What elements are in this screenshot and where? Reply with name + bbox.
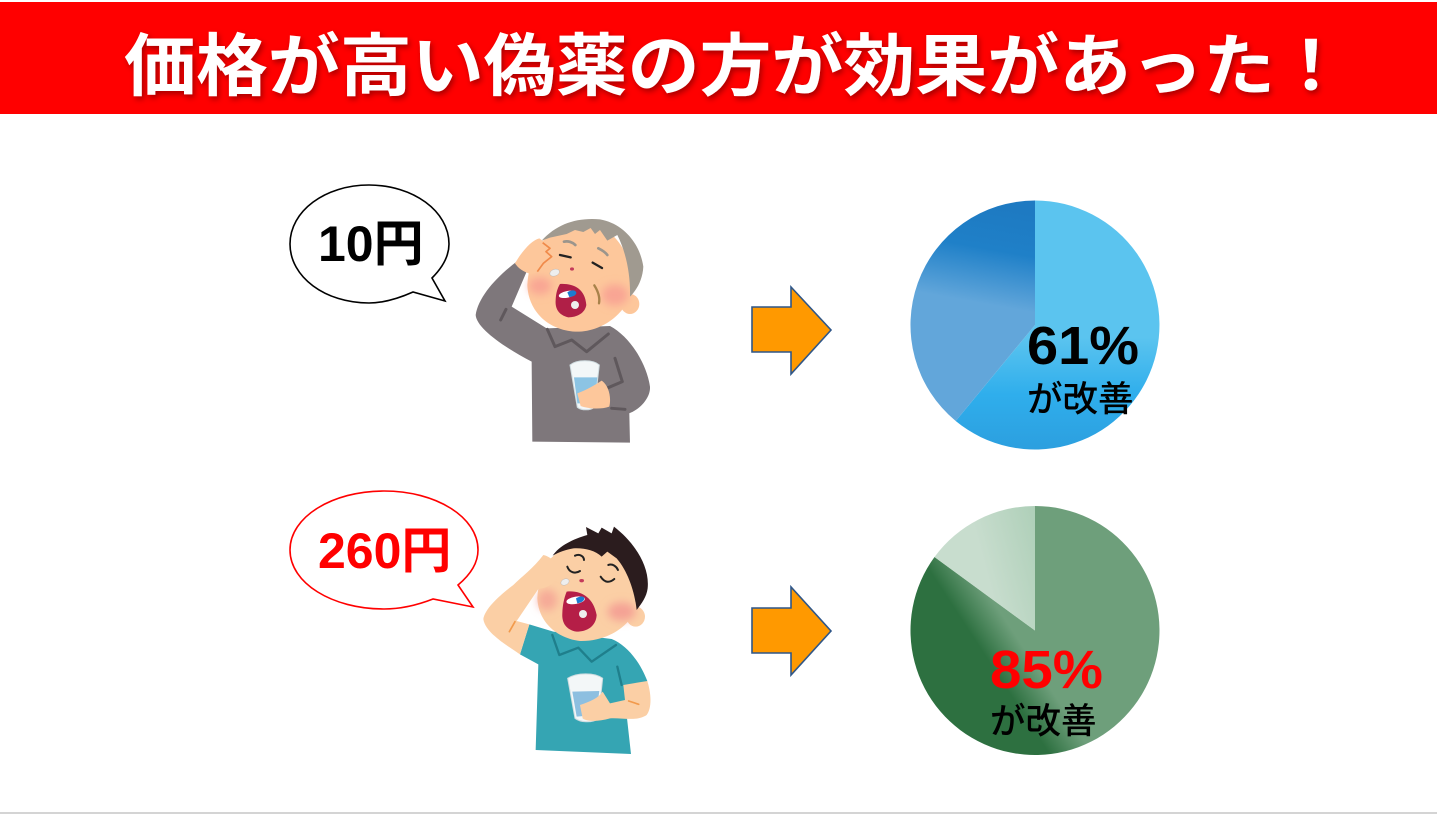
arrow: 10円 to result (752, 287, 831, 374)
speech bubble: 10円 (290, 185, 449, 303)
speech bubble: 260円: 260円 (318, 523, 451, 579)
label: が改善: が改善 (990, 701, 1097, 741)
arrow: 260円 to result (752, 587, 831, 675)
illustration: young man taking pill (483, 527, 650, 754)
title: 価格が高い偽薬の方が効果があった！ (124, 29, 1347, 105)
pie chart: 61% improved (910, 200, 1159, 449)
title banner (0, 2, 1437, 114)
illustration: older man taking pill (476, 219, 650, 443)
label: 85%: 85% (990, 640, 1103, 700)
label: が改善: が改善 (1027, 379, 1134, 419)
speech bubble: 10円: 10円 (318, 216, 424, 272)
speech bubble: 260円 (290, 491, 478, 609)
label: 61%: 61% (1027, 316, 1139, 376)
pie chart: 85% improved (910, 506, 1159, 755)
